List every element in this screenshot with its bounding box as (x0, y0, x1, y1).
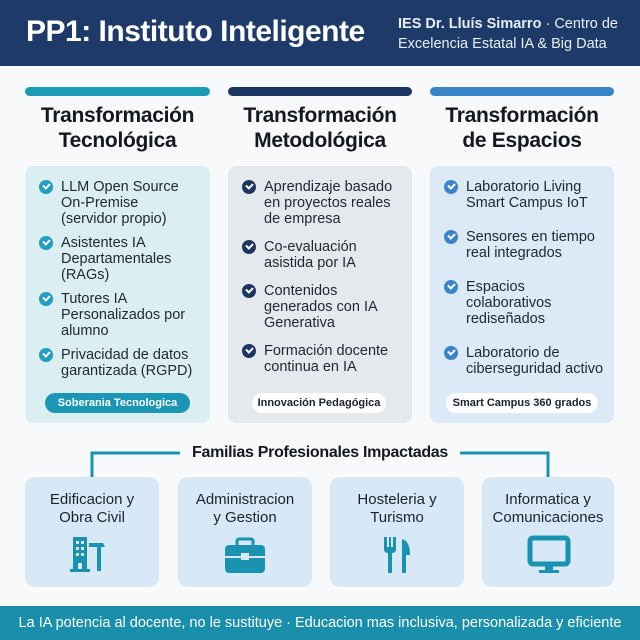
panel: tecnologica: (servidor propio) (61, 211, 167, 227)
footer (0, 606, 640, 640)
panel: espacios (430, 166, 614, 423)
badge (45, 393, 190, 413)
panel: espacios: Laboratorio Living (466, 179, 581, 195)
icon: briefcase (225, 538, 265, 573)
card: informatica: Informatica y (505, 491, 591, 508)
panel: espacios: real integrados (466, 245, 562, 261)
panel: metodologica: generados con IA (264, 299, 378, 315)
bar 1 (25, 87, 210, 96)
panel: espacios: ciberseguridad activo (466, 361, 603, 377)
panel: tecnologica: LLM Open Source (61, 179, 179, 195)
card: edificacion (25, 477, 159, 587)
header (0, 0, 640, 66)
panel: metodologica: en proyectos reales (264, 195, 391, 211)
panel: metodologica: Co-evaluación (264, 239, 357, 255)
heading 1: Transformación (41, 104, 194, 127)
panel: metodologica: asistida por IA (264, 255, 356, 271)
badge (446, 393, 598, 413)
icon: building hammer (70, 537, 105, 572)
card: informatica: Comunicaciones (493, 509, 603, 526)
panel: tecnologica: Departamentales (61, 251, 171, 267)
icon: fork knife (384, 537, 410, 573)
panel: tecnologica: On-Premise (61, 195, 138, 211)
badge (252, 393, 386, 413)
families title: Familias Profesionales Impactadas (192, 444, 448, 461)
heading 2 (243, 104, 397, 152)
card: administracion: Administracion (196, 491, 294, 508)
connector lines (90, 452, 550, 477)
heading 1 (41, 104, 194, 152)
card: administracion (178, 477, 312, 587)
badge: Soberania Tecnologica (58, 397, 177, 409)
panel: tecnologica: Privacidad de datos (61, 347, 188, 363)
subtitle: IES Dr. Lluís Simarro · Centro de (398, 16, 618, 32)
panel: metodologica: Aprendizaje basado (264, 179, 392, 195)
card: informatica (482, 477, 614, 587)
card: administracion: y Gestion (213, 509, 277, 526)
panel: tecnologica: Personalizados por (61, 307, 185, 323)
panel: metodologica: Generativa (264, 315, 335, 331)
panel: espacios: rediseñados (466, 311, 545, 327)
panel: espacios: colaborativos (466, 295, 551, 311)
title: PP1: Instituto Inteligente (26, 15, 365, 48)
panel: espacios: Sensores en tiempo (466, 229, 595, 245)
panel: metodologica: Contenidos (264, 283, 337, 299)
panel: metodologica: continua en IA (264, 359, 357, 375)
card: hosteleria: Turismo (370, 509, 424, 526)
heading 3 (445, 104, 599, 152)
badge: Innovación Pedagógica (258, 397, 380, 409)
bar 2 (228, 87, 412, 96)
panel: metodologica: de empresa (264, 211, 341, 227)
card: hosteleria (330, 477, 464, 587)
panel: tecnologica: alumno (61, 323, 109, 339)
panel: tecnologica: (RAGs) (61, 267, 109, 283)
heading 2: Metodológica (254, 129, 386, 152)
panel: espacios: Smart Campus IoT (466, 195, 588, 211)
icon: monitor (528, 536, 570, 573)
card: edificacion: Edificacion y (50, 491, 134, 508)
subtitle (398, 16, 618, 52)
panel: espacios: Espacios (466, 279, 525, 295)
footer: La IA potencia al docente, no le sustituye · Educacion mas inclusiva, personalizada y eficiente (19, 615, 621, 631)
panel: espacios: Laboratorio de (466, 345, 560, 361)
heading 2: Transformación (243, 104, 397, 127)
bar 3 (430, 87, 614, 96)
panel: tecnologica: garantizada (RGPD) (61, 363, 192, 379)
panel: tecnologica (25, 166, 210, 423)
panel: tecnologica: Tutores IA (61, 291, 127, 307)
heading 3: Transformación (445, 104, 599, 127)
card: hosteleria: Hosteleria y (357, 491, 437, 508)
panel: metodologica: Formación docente (264, 343, 388, 359)
panel: tecnologica: Asistentes IA (61, 235, 146, 251)
card: edificacion: Obra Civil (59, 509, 125, 526)
panel: metodologica (228, 166, 412, 423)
badge: Smart Campus 360 grados (453, 397, 591, 409)
subtitle: Excelencia Estatal IA & Big Data (398, 36, 607, 52)
heading 1: Tecnológica (59, 129, 176, 152)
heading 3: de Espacios (462, 129, 582, 152)
